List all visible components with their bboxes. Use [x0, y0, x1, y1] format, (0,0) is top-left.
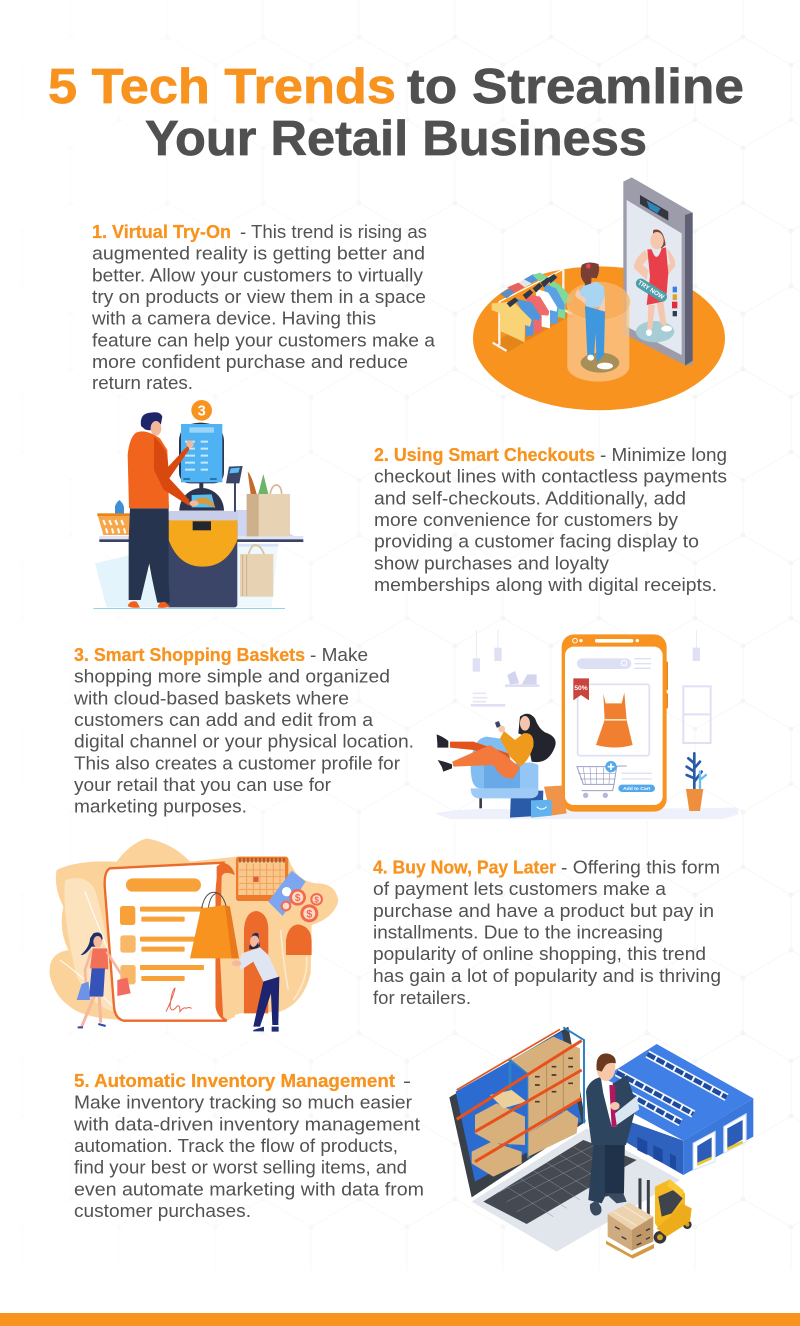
- grocery bags: [240, 472, 290, 597]
- text block: 1. Virtual Try-On: augmented reality is getting better and: [92, 244, 425, 264]
- text block: 1. Virtual Try-On: - This trend is rising as: [240, 222, 427, 242]
- text block: 4. Buy Now, Pay Later: 4. Buy Now, Pay Later: [373, 858, 556, 878]
- text block: 3. Smart Shopping Baskets: This also creates a customer profile for: [74, 753, 400, 773]
- pallet of boxes: [606, 1203, 654, 1259]
- title: 5 Tech Trends: [48, 60, 396, 114]
- text block: 3. Smart Shopping Baskets: [73, 645, 414, 817]
- background blobs: [50, 838, 338, 1020]
- arch shapes: [244, 911, 312, 1013]
- text block: 1. Virtual Try-On: more confident purchase and reduce: [92, 352, 408, 372]
- document: [105, 863, 235, 1022]
- text block: 1. Virtual Try-On: return rates.: [92, 373, 193, 393]
- text block: 3. Smart Shopping Baskets: shopping more simple and organized: [74, 667, 390, 687]
- text block: 2. Using Smart Checkouts: show purchases and loyalty: [374, 553, 609, 573]
- text block: 2. Using Smart Checkouts: more convenience for customers by: [374, 510, 678, 530]
- footer bar: [0, 1313, 800, 1326]
- illustration: buy now pay later: [50, 838, 338, 1032]
- clothing rack: [492, 269, 573, 351]
- text block: 4. Buy Now, Pay Later: - Offering this form: [561, 858, 720, 878]
- text block: 5. Automatic Inventory Management: with data-driven inventory management: [73, 1114, 420, 1134]
- sale badge: [573, 678, 589, 700]
- text block: 3. Smart Shopping Baskets: your retail that you can use for: [74, 775, 331, 795]
- text block: 1. Virtual Try-On: better. Allow your customers to virtually: [92, 265, 423, 285]
- warehouse shelves: [457, 1027, 584, 1177]
- cart: Add to Cart: [623, 786, 651, 792]
- dress: [596, 693, 633, 747]
- money and coins: [268, 871, 323, 922]
- number badge: 3: [198, 404, 206, 420]
- text block: 3. Smart Shopping Baskets: digital channel or your physical location.: [74, 732, 414, 752]
- text block: 3. Smart Shopping Baskets: 3. Smart Shopping Baskets: [74, 645, 305, 665]
- text block: 3. Smart Shopping Baskets: with cloud-based baskets where: [73, 688, 349, 708]
- text block: 1. Virtual Try-On: [91, 222, 436, 393]
- shopping bag: [190, 892, 239, 958]
- text block: 5. Automatic Inventory Management: Make inventory tracking so much easier: [74, 1093, 412, 1113]
- plant: [686, 753, 706, 811]
- text block: 5. Automatic Inventory Management: customer purchases.: [74, 1201, 251, 1221]
- number badge: [191, 400, 212, 421]
- kiosk: [166, 423, 238, 607]
- text block: 4. Buy Now, Pay Later: for retailers.: [373, 988, 471, 1008]
- mirror frame: TRY NOW: [636, 279, 665, 301]
- text block: 5. Automatic Inventory Management: even automate marketing with data from: [74, 1179, 424, 1199]
- room decor: [435, 630, 738, 819]
- money and coins: $: [295, 893, 301, 904]
- illustration: virtual try-on mirror: [473, 177, 725, 410]
- text block: 2. Using Smart Checkouts: [374, 445, 727, 595]
- seated woman: [437, 714, 556, 778]
- text block: 1. Virtual Try-On: with a camera device. Having this: [91, 309, 376, 329]
- orange floor ellipse: [473, 266, 725, 410]
- text block: 4. Buy Now, Pay Later: purchase and have a product but pay in: [373, 901, 714, 921]
- text block: 4. Buy Now, Pay Later: installments. Due to the increasing: [373, 922, 663, 942]
- basket and bottle: [97, 500, 132, 535]
- text block: 2. Using Smart Checkouts: 2. Using Smart Checkouts: [374, 445, 595, 465]
- text block: 1. Virtual Try-On: 1. Virtual Try-On: [92, 222, 231, 242]
- illustration: smart checkout: [93, 400, 303, 609]
- text block: 4. Buy Now, Pay Later: has gain a lot of popularity and is thriving: [373, 966, 721, 986]
- money and coins: $: [306, 908, 312, 920]
- text block: 4. Buy Now, Pay Later: popularity of online shopping, this trend: [373, 944, 706, 964]
- phone: [562, 634, 668, 812]
- woman with bags: [77, 932, 131, 1027]
- text block: 1. Virtual Try-On: try on products or view them in a space: [92, 287, 426, 307]
- text block: 3. Smart Shopping Baskets: - Make: [310, 645, 368, 665]
- warehouse: [587, 1044, 753, 1175]
- text block: 5. Automatic Inventory Management: automation. Track the flow of products,: [74, 1136, 398, 1156]
- man with tablet: [586, 1053, 639, 1216]
- mirror frame: [623, 177, 693, 366]
- cart: [577, 761, 655, 798]
- text block: 4. Buy Now, Pay Later: of payment lets customers make a: [373, 879, 667, 899]
- text block: 5. Automatic Inventory Management: 5. Automatic Inventory Management: [74, 1071, 395, 1091]
- text block: 4. Buy Now, Pay Later: [373, 858, 721, 1008]
- text block: 1. Virtual Try-On: feature can help your customers make a: [92, 330, 436, 350]
- armchair: [471, 737, 538, 808]
- text block: 2. Using Smart Checkouts: and self-checkouts. Additionally, add: [374, 488, 686, 508]
- text block: 3. Smart Shopping Baskets: marketing purposes.: [74, 797, 247, 817]
- shopping bags: [510, 781, 567, 818]
- forklift: [640, 1178, 692, 1244]
- laptop: [449, 1027, 680, 1252]
- man with bag: [232, 933, 279, 1032]
- shopper man: [128, 412, 199, 608]
- illustration: smart shopping phone: [435, 630, 738, 819]
- text block: 5. Automatic Inventory Management: find your best or worst selling items, and: [74, 1158, 407, 1178]
- text block: 2. Using Smart Checkouts: - Minimize long: [600, 445, 727, 465]
- title: to Streamline: [407, 60, 744, 114]
- light beam: [567, 282, 630, 382]
- calendar: [236, 857, 288, 901]
- customer woman: [575, 263, 613, 369]
- card terminal: [226, 466, 243, 512]
- text block: 5. Automatic Inventory Management: -: [403, 1071, 411, 1091]
- text block: 2. Using Smart Checkouts: checkout lines with contactless payments: [374, 467, 727, 487]
- money and coins: $: [314, 895, 319, 904]
- illustration: inventory management: [449, 1027, 753, 1259]
- title: Your Retail Business: [145, 112, 647, 166]
- text block: 2. Using Smart Checkouts: memberships along with digital receipts.: [374, 575, 717, 595]
- title: [48, 60, 744, 166]
- text block: 5. Automatic Inventory Management: [73, 1071, 424, 1221]
- counter: [93, 510, 303, 609]
- text block: 2. Using Smart Checkouts: providing a customer facing display to: [374, 532, 699, 552]
- text block: 3. Smart Shopping Baskets: customers can add and edit from a: [74, 710, 374, 730]
- sale badge: 50%: [574, 685, 588, 692]
